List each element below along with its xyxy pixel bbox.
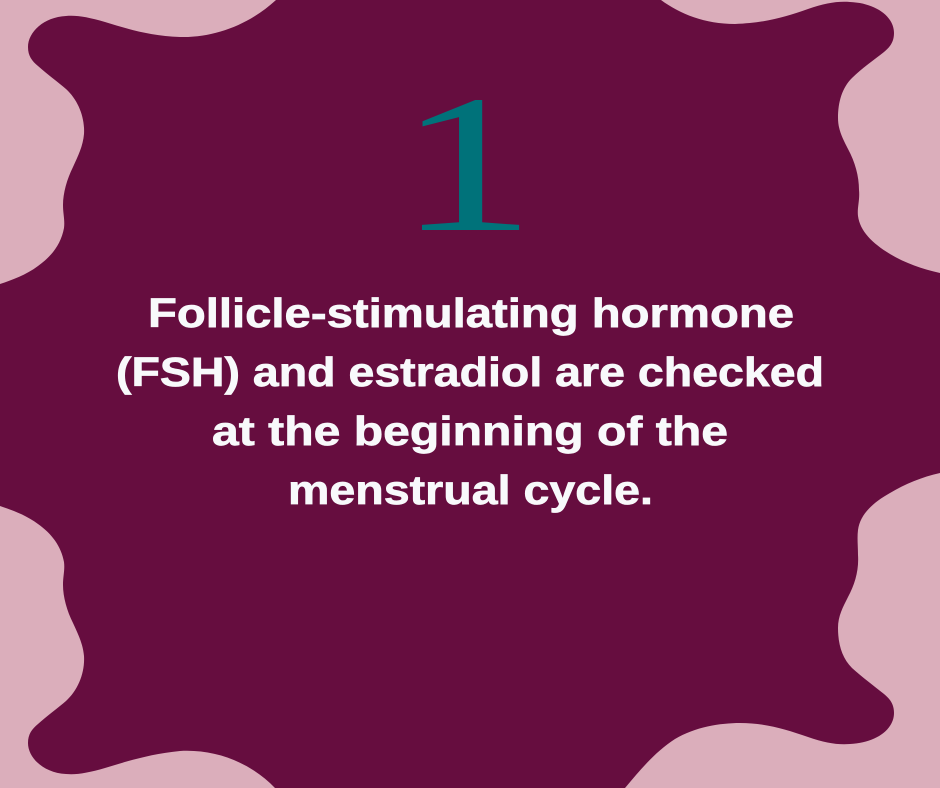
numeral: step number 1: 1 <box>398 54 536 273</box>
line 4: menstrual cycle. <box>288 467 653 513</box>
text block: description <box>116 290 824 513</box>
line 2: (FSH) and estradiol are checked <box>116 349 824 395</box>
line 1: Follicle-stimulating hormone <box>148 290 794 336</box>
line 3: at the beginning of the <box>212 408 728 454</box>
